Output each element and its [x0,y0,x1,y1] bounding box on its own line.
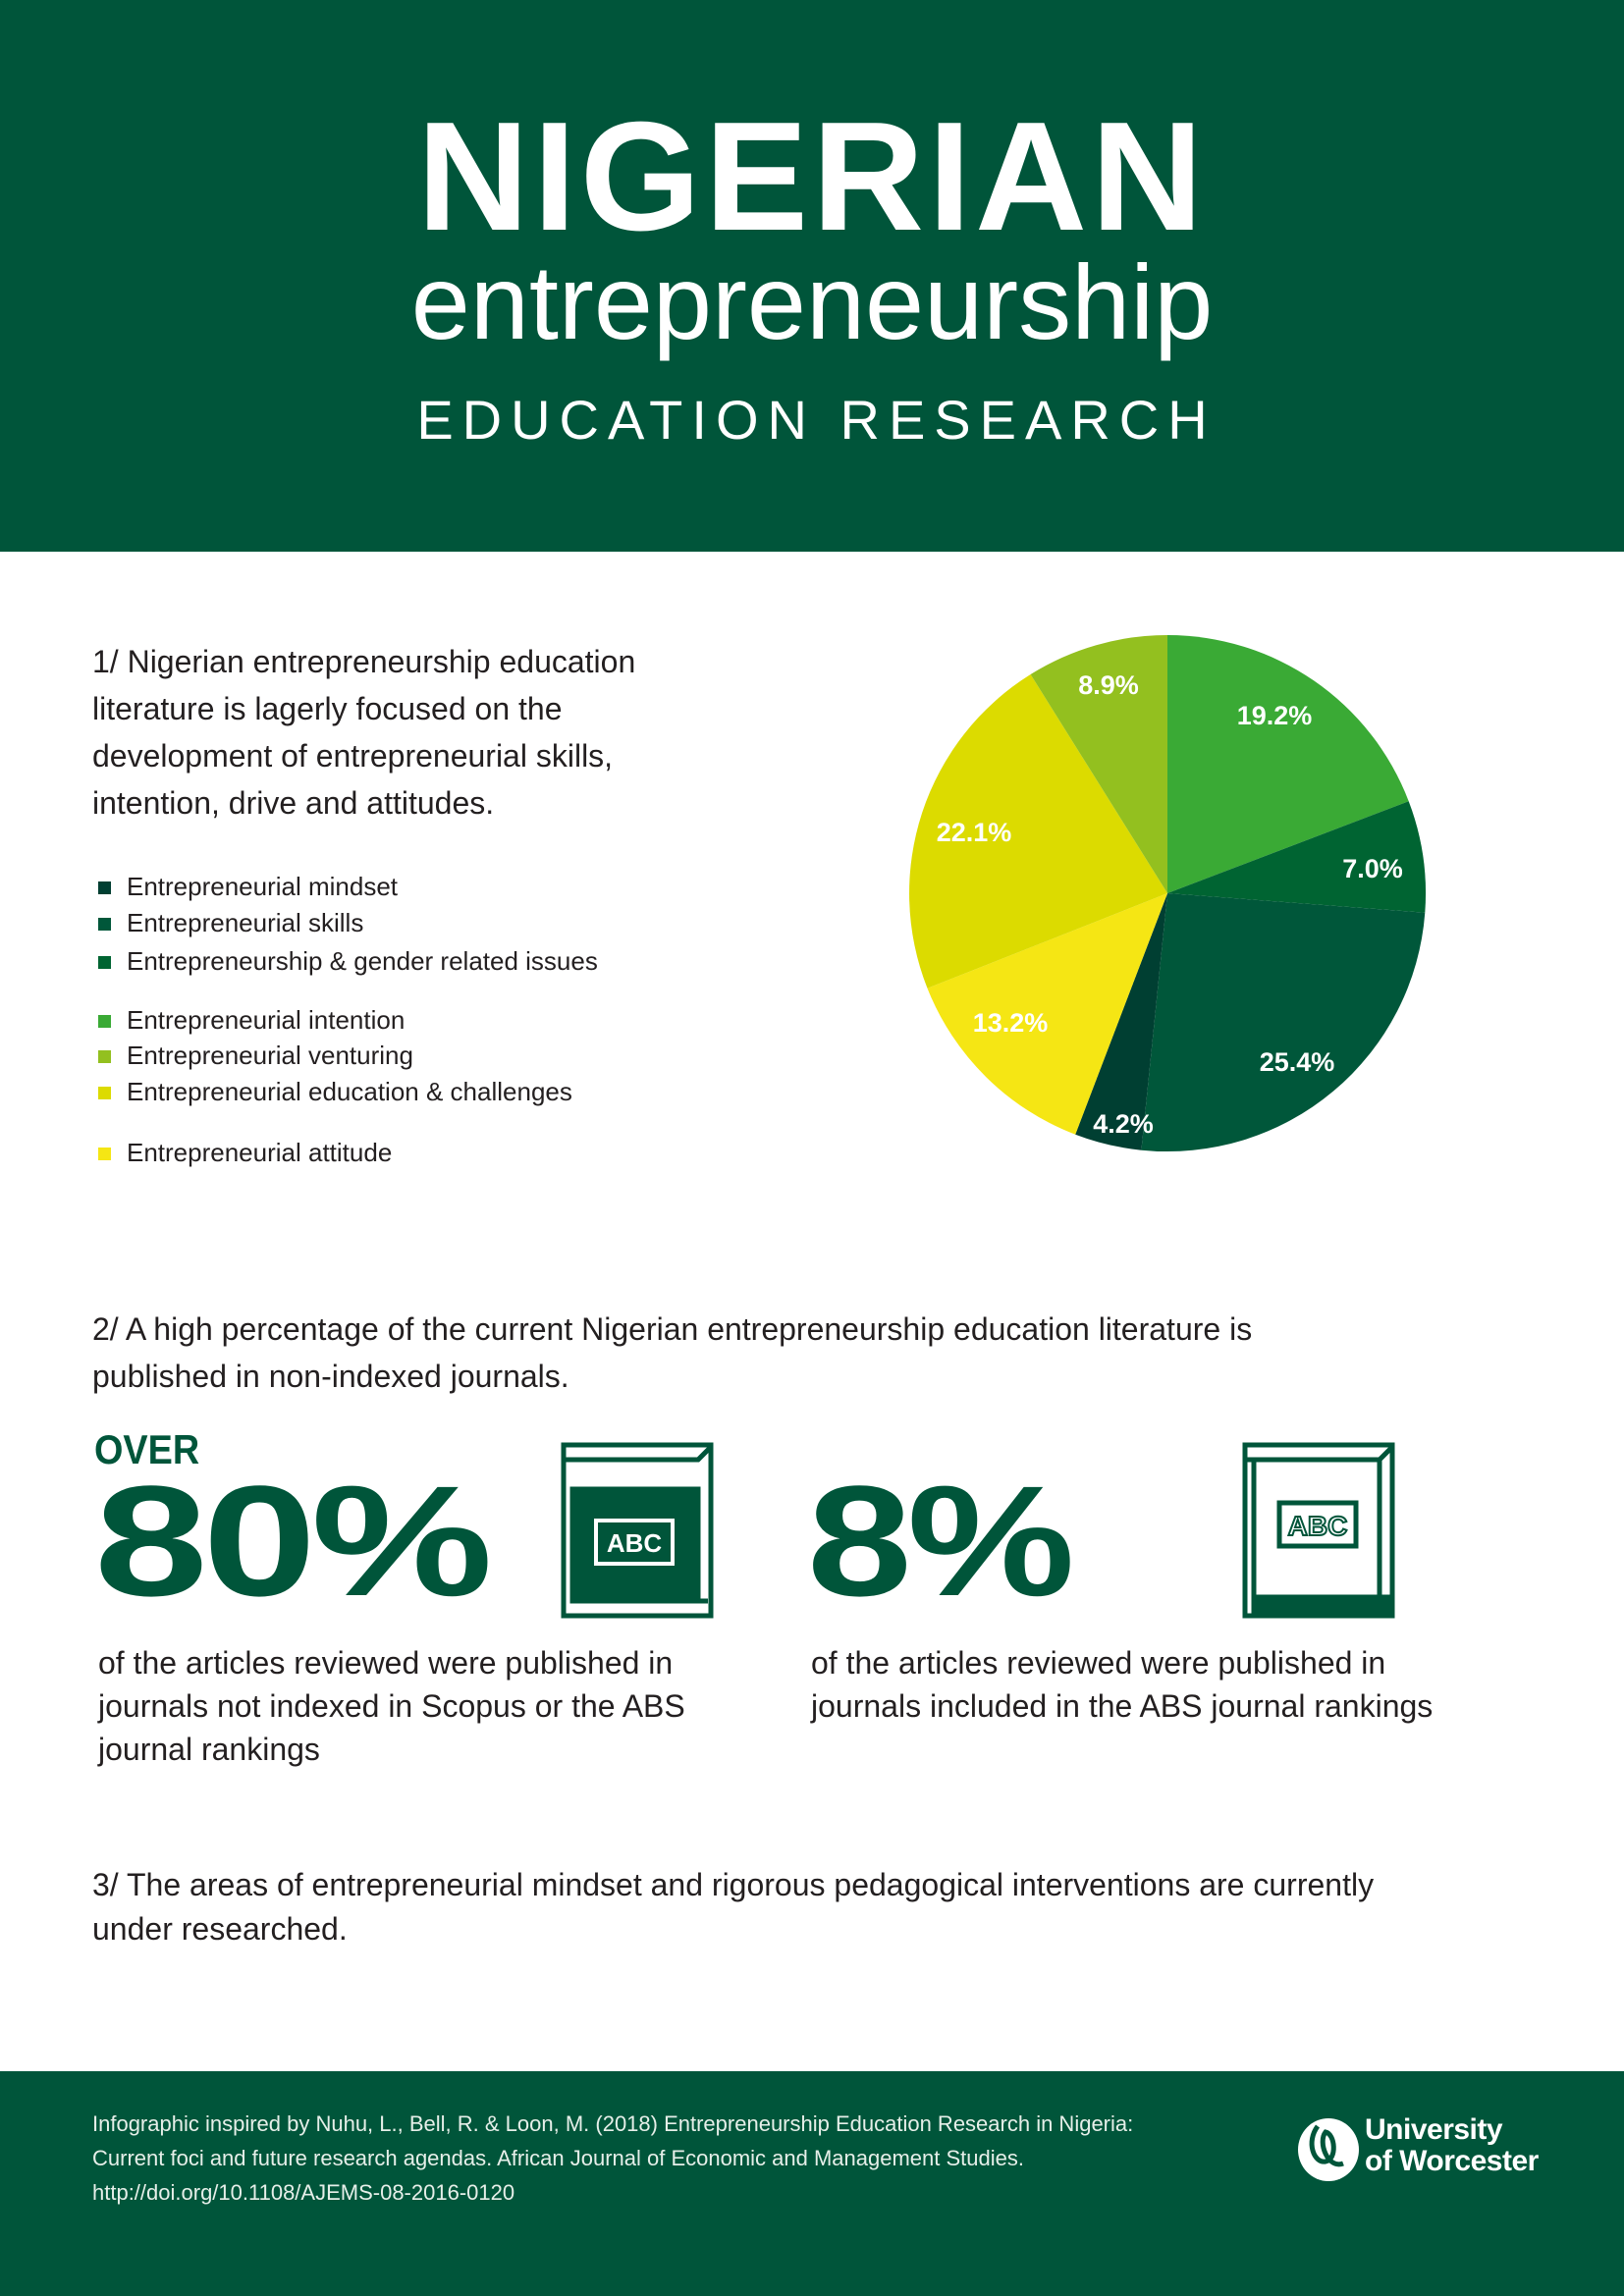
legend: Entrepreneurial venturing [127,1041,413,1070]
text: point 2: 2/ A high percentage of the current Nigerian entrepreneurship education literature is published in non-indexed journals. [92,1311,1252,1394]
pie chart: 4.2% [1093,1109,1154,1139]
icon: book dark [562,1443,713,1618]
title: NIGERIAN: NIGERIAN [417,90,1207,263]
stat: 8%: 8% [807,1453,1070,1629]
caption: 80%: of the articles reviewed were published in journals not indexed in Scopus or the ABS journal rankings [98,1645,685,1767]
pie chart: 13.2% [973,1008,1048,1038]
pie chart: 22.1% [937,818,1011,847]
legend: Entrepreneurial intention [127,1005,405,1035]
subtitle: EDUCATION RESEARCH: EDUCATION RESEARCH [416,389,1217,451]
text: point 1: 1/ Nigerian entrepreneurship education literature is lagerly focused on the development of entrepreneurial skills, intention, drive and attitudes. [92,644,635,821]
legend: Entrepreneurial attitude [127,1138,392,1167]
header banner [0,0,1624,552]
legend: Entrepreneurial education & challenges [127,1077,572,1106]
legend [98,872,598,1167]
footer citation [92,2111,1133,2205]
icon: book light: ABC [1288,1511,1347,1541]
text: point 3: 3/ The areas of entrepreneurial mindset and rigorous pedagogical interventions are currently under researched. [92,1867,1374,1947]
pie chart: 8.9% [1078,670,1139,700]
icon: book light [1243,1443,1394,1618]
legend: Entrepreneurial mindset [127,872,398,901]
logo: University of Worcester: of Worcester [1365,2145,1539,2177]
logo: University of Worcester [1298,2113,1539,2181]
legend: Entrepreneurship & gender related issues [127,946,598,976]
stat: OVER 80%: 80% [94,1453,488,1629]
pie chart: 7.0% [1342,854,1403,883]
pie chart: 19.2% [1237,701,1312,730]
subtitle: entrepreneurship: entrepreneurship [411,242,1213,361]
logo: University of Worcester: University [1365,2113,1502,2146]
footer [0,2071,1624,2296]
pie chart [909,635,1426,1151]
footer citation: Infographic inspired by Nuhu, L., Bell, R. & Loon, M. (2018) Entrepreneurship Education Research in Nigeria: Current foci and future research agendas. African Journal of Economic and Management Studies. [92,2111,1133,2170]
caption: 8%: of the articles reviewed were published in journals included in the ABS journal rankings [811,1645,1433,1724]
legend: Entrepreneurial skills [127,908,363,937]
stat: OVER 80%: OVER [94,1426,199,1472]
icon: book dark: ABC [607,1528,662,1558]
pie chart: 25.4% [1260,1047,1334,1077]
footer citation: http://doi.org/10.1108/AJEMS-08-2016-0120 [92,2180,514,2205]
